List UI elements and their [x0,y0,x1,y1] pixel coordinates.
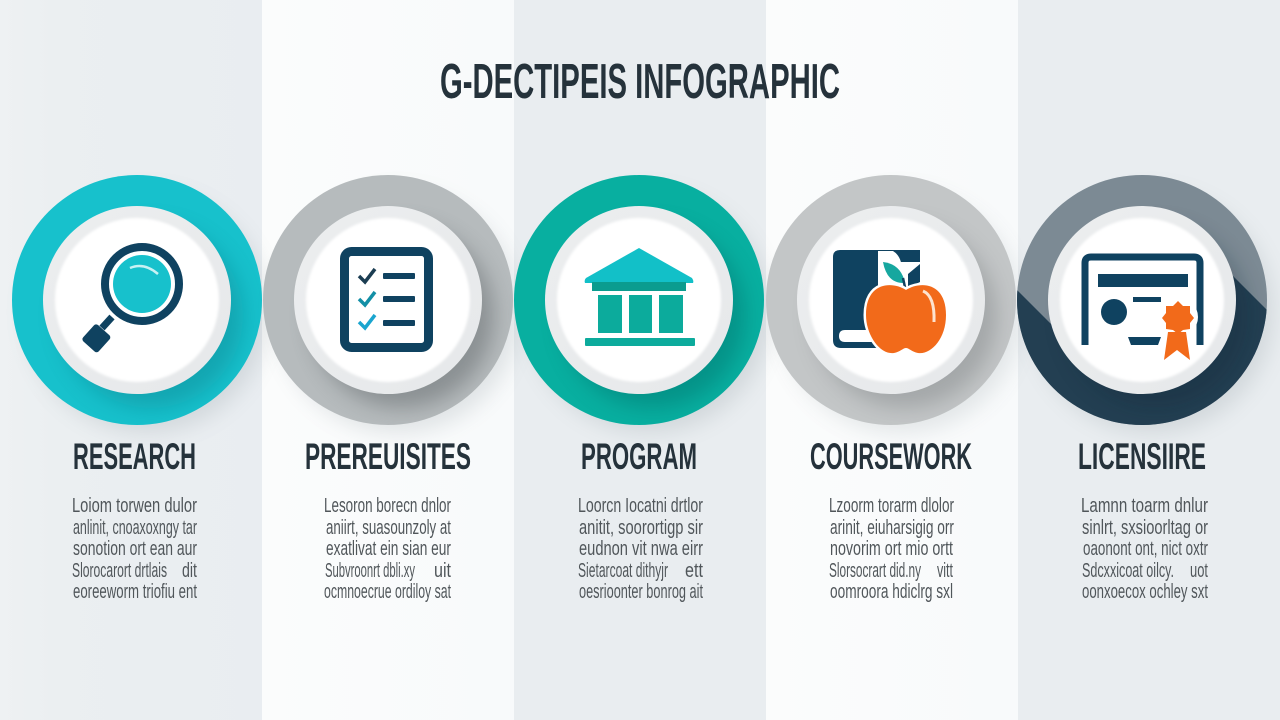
heading: licensure: LICENSIIRE [1078,436,1206,477]
text block: prerequisites: aniirt, suasounzoly at [326,517,451,539]
heading: program: PROGRAM [581,436,697,477]
text block: prerequisites: Subvroonrt dbli.xy [325,560,415,582]
text block: research: anlinit, cnoaxoxngy tar [73,517,197,539]
text block: coursework: Lzoorm torarm dlolor [829,495,954,517]
research ring [12,175,268,433]
text block: program: oesrioonter bonrog ait [579,581,703,603]
prerequisites ring [263,175,519,433]
text block: coursework: vitt [937,560,953,582]
text block: prerequisites: Lesoron borecn dnlor [324,495,451,517]
panel: program [514,175,770,603]
text block: research: eoreeworm triofiu ent [73,581,197,603]
panel: prerequisites [263,175,519,603]
text block: program [578,495,703,603]
text block: licensure: sinlrt, sxsioorltag or [1082,517,1208,539]
text block: licensure: oaonont ont, nict oxtr [1083,538,1208,560]
text block: prerequisites: ocmnoecrue ordiloy sat [324,581,451,603]
text block: coursework: Slorsocrart did.ny [829,560,921,582]
text block: licensure: oonxoecox ochley sxt [1082,581,1208,603]
icon: book and apple [833,250,946,353]
heading: prerequisites: PREREUISITES [305,436,471,477]
text block: licensure: Sdcxxicoat oilcy. [1082,560,1174,582]
heading: research: RESEARCH [73,436,196,477]
icon: magnifying glass [81,247,179,354]
panel: licensure [1010,175,1280,603]
text block: coursework: oomroora hdiclrg sxl [830,581,953,603]
text block: licensure: uot [1190,560,1208,582]
program ring [514,175,770,433]
text block: research: sonotion ort ean aur [73,538,197,560]
text block: program: eudnon vit nwa eirr [579,538,703,560]
coursework ring [766,175,1022,433]
panel: coursework [766,175,1022,603]
title: G-DECTIPEIS INFOGRAPHIC [440,55,840,109]
text block: program: Sietarcoat dithyjr [578,560,668,582]
text block: program: Loorcn Iocatni drtlor [578,495,703,517]
heading: coursework: COURSEWORK [810,436,972,477]
icon: certificate [1085,257,1200,360]
text block: research: Slorocarort drtlais [72,560,167,582]
icon: checklist [344,252,428,348]
text block: coursework: arinit, eiuharsigig orr [830,517,954,539]
text block: research: dit [182,560,197,582]
text block: program: anitit, soorortigp sir [579,517,703,539]
text block: prerequisites: exatlivat ein sian eur [326,538,451,560]
panel: research [12,175,268,603]
text block: coursework: novorim ort mio ortt [830,538,953,560]
text block: program: ett [685,560,703,582]
text block: prerequisites: uit [434,560,451,582]
text block: research: Loiom torwen dulor [72,495,197,517]
licensure ring [1010,175,1280,433]
icon: institution building [585,248,695,346]
text block: research [72,495,197,603]
text block: coursework [829,495,954,603]
text block: licensure: Lamnn toarm dnlur [1081,495,1208,517]
text block: licensure [1081,495,1208,603]
text block: prerequisites [324,495,451,603]
